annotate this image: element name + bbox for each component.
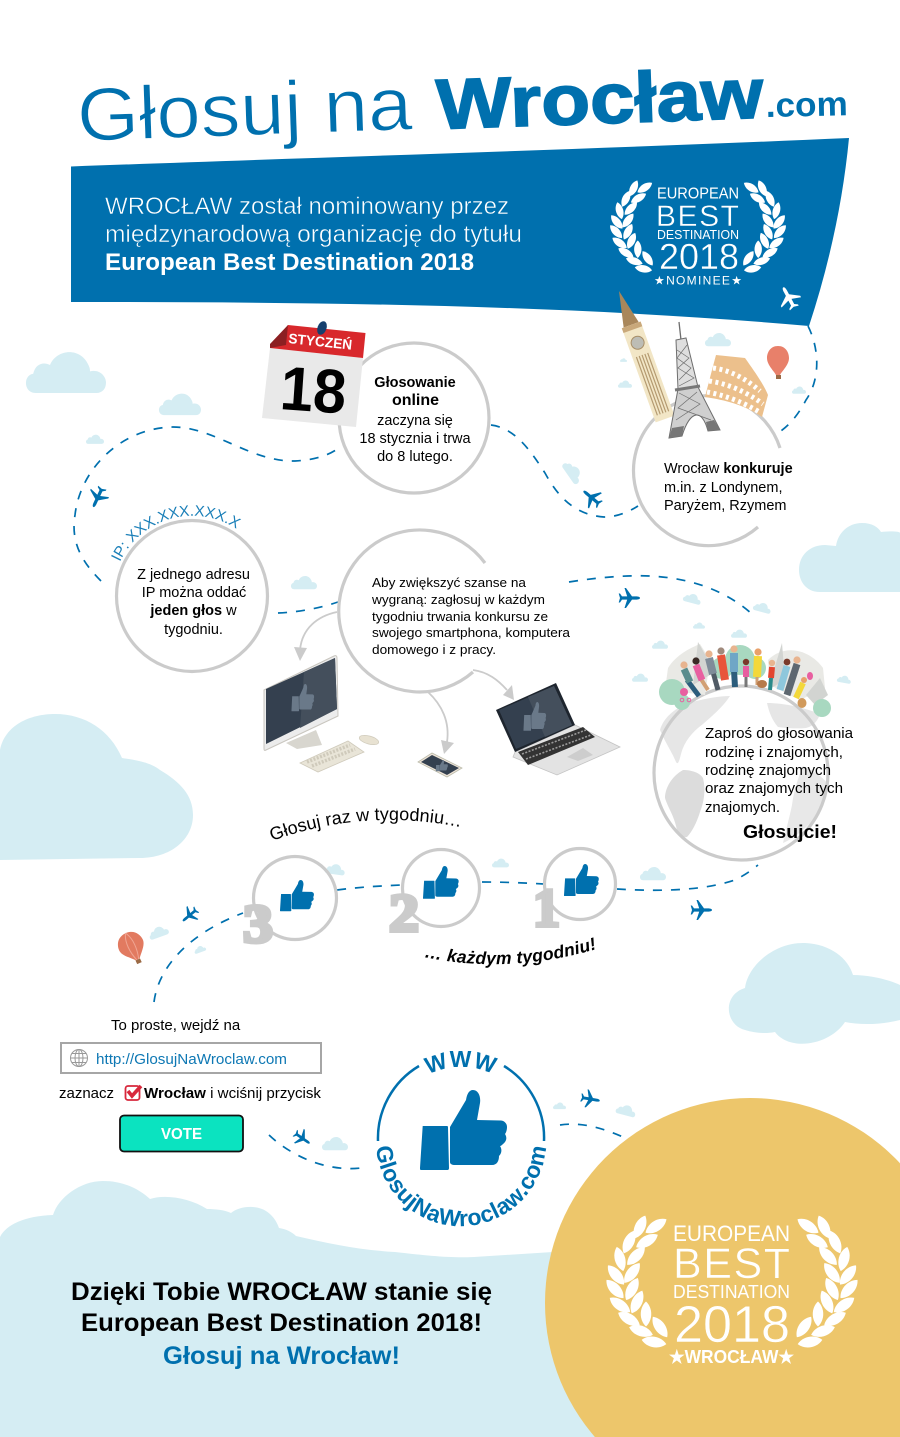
- icon: hot air balloon top: [767, 346, 789, 379]
- icon: Eiffel Tower: [669, 322, 720, 438]
- competing cities text: Paryżem, Rzymem: [664, 498, 786, 514]
- voting dates text: Głosowanie: [374, 375, 456, 391]
- icon: calendar: STYCZEŃ: [288, 330, 353, 353]
- white plane on banner: [774, 282, 804, 313]
- multi-device text: wygraną: zagłosuj w każdym: [371, 592, 545, 607]
- banner text: European Best Destination 2018: [105, 249, 474, 276]
- grey arrows to devices: [294, 612, 514, 754]
- nominee laurel badge: ★NOMINEE★: [654, 274, 742, 288]
- invitation text: Zaproś do głosowania: [705, 726, 854, 742]
- icon: Colosseum: [705, 355, 768, 417]
- nominee laurel badge: BEST: [656, 200, 739, 233]
- voting dates text: 18 stycznia i trwa: [359, 431, 472, 447]
- invitation text: Głosujcie!: [743, 822, 837, 842]
- IP rule text: IP można oddać: [142, 585, 246, 601]
- IP rule text: tygodniu.: [164, 622, 223, 638]
- title: Głosuj na: [76, 61, 414, 157]
- IP address label on arc: IP: XXX.XXX.XXX.X: [111, 505, 242, 561]
- multi-device text: swojego smartphona, komputera: [372, 625, 571, 640]
- multi-device text: [371, 575, 571, 657]
- vote button: VOTE: [161, 1126, 202, 1143]
- curved caption: vote once a week: Głosuj raz w tygodniu…: [270, 808, 459, 840]
- checkbox line: zaznacz: [59, 1085, 114, 1102]
- title: Wrocław: [435, 55, 765, 145]
- step 3 circle: [243, 856, 336, 954]
- winner laurel badge: [603, 1213, 861, 1367]
- yellow sun circle: [545, 1098, 900, 1437]
- nominee laurel badge: DESTINATION: [657, 228, 739, 242]
- URL input box: http://GlosujNaWroclaw.com: [96, 1051, 287, 1068]
- title: .com: [765, 85, 848, 125]
- competing cities text: Wrocław konkuruje: [664, 461, 793, 477]
- competing cities text: [664, 461, 793, 514]
- IP rule text: jeden głos w: [149, 603, 237, 619]
- winner laurel badge: DESTINATION: [673, 1282, 790, 1302]
- multi-device text: Aby zwiększyć szanse na: [372, 575, 527, 590]
- panel: multi-device circle: [339, 530, 571, 692]
- closing message: Dzięki Tobie WROCŁAW stanie się: [71, 1278, 492, 1306]
- icon: calendar: [262, 320, 366, 428]
- IP rule text: Z jednego adresu: [137, 567, 250, 583]
- winner laurel badge: EUROPEAN: [673, 1221, 790, 1246]
- banner text: międzynarodową organizację do tytułu: [105, 221, 522, 248]
- panel: online voting circle: [339, 343, 489, 493]
- www badge with thumb: WWW: [423, 1051, 498, 1073]
- step 1 circle: 1: [533, 878, 560, 938]
- curved caption: every week: … każdym tygodniu!: [425, 937, 594, 968]
- step 2 circle: 2: [389, 883, 419, 943]
- step 1 circle: [533, 848, 616, 938]
- icon: smartphone: [418, 753, 462, 777]
- icon: hot air balloon lower: [114, 928, 151, 969]
- winner laurel badge: BEST: [673, 1240, 790, 1288]
- multi-device text: tygodniu trwania konkursu ze: [372, 609, 548, 624]
- step 3 circle: 3: [243, 894, 273, 954]
- invitation text: [705, 726, 854, 842]
- icon: desktop computer: [264, 656, 380, 772]
- small scattered clouds: [86, 333, 852, 1150]
- nominee laurel badge: [607, 179, 789, 288]
- panel: IP circle: [111, 505, 270, 674]
- closing message: [71, 1278, 492, 1370]
- IP rule text: [137, 567, 250, 638]
- dashed flight paths: [74, 326, 817, 1169]
- winner laurel badge: ★WROCŁAW★: [669, 1347, 795, 1367]
- step 2 circle: [389, 850, 480, 943]
- voting dates text: do 8 lutego.: [377, 449, 453, 465]
- icon: Big Ben: [610, 288, 674, 422]
- header banner: [71, 138, 849, 326]
- icon: calendar: 18: [278, 354, 349, 428]
- URL input box: [61, 1043, 321, 1073]
- winner laurel badge: 2018: [674, 1296, 790, 1354]
- closing message: Głosuj na Wrocław!: [163, 1342, 400, 1370]
- invitation text: rodzinę i znajomych,: [705, 745, 843, 761]
- bottom cloud panel: [0, 1181, 600, 1437]
- nominee laurel badge: 2018: [659, 236, 739, 277]
- closing message: European Best Destination 2018!: [81, 1309, 482, 1337]
- voting dates text: online: [392, 392, 439, 409]
- illustration: family on top of globe: [659, 642, 831, 717]
- icon: laptop: [496, 683, 620, 775]
- invitation text: oraz znajomych tych: [705, 781, 843, 797]
- instructions: how to vote: To proste, wejdź na: [111, 1017, 241, 1034]
- large background clouds: [0, 352, 900, 1044]
- invitation text: znajomych.: [705, 800, 780, 816]
- nominee laurel badge: EUROPEAN: [657, 186, 739, 202]
- banner text: WROCŁAW został nominowany przez: [105, 193, 509, 220]
- vote button: [120, 1116, 243, 1152]
- panel: globe circle with continents: [654, 686, 854, 860]
- title: [76, 55, 848, 157]
- checkbox line: [59, 1085, 321, 1102]
- www badge with thumb: GlosujNaWroclaw.com: [376, 1146, 546, 1226]
- banner text: [105, 193, 522, 276]
- voting dates text: zaczyna się: [377, 413, 453, 429]
- checkbox line: Wrocław i wciśnij przycisk: [144, 1085, 321, 1102]
- invitation text: rodzinę znajomych: [705, 763, 831, 779]
- www badge with thumb: [376, 1051, 546, 1226]
- competing cities text: m.in. z Londynem,: [664, 480, 782, 496]
- planes: [84, 483, 712, 1150]
- multi-device text: domowego i z pracy.: [372, 642, 496, 657]
- panel: competing cities circle: [634, 396, 793, 546]
- voting dates text: [359, 375, 472, 465]
- instructions: how to vote: [59, 1017, 321, 1152]
